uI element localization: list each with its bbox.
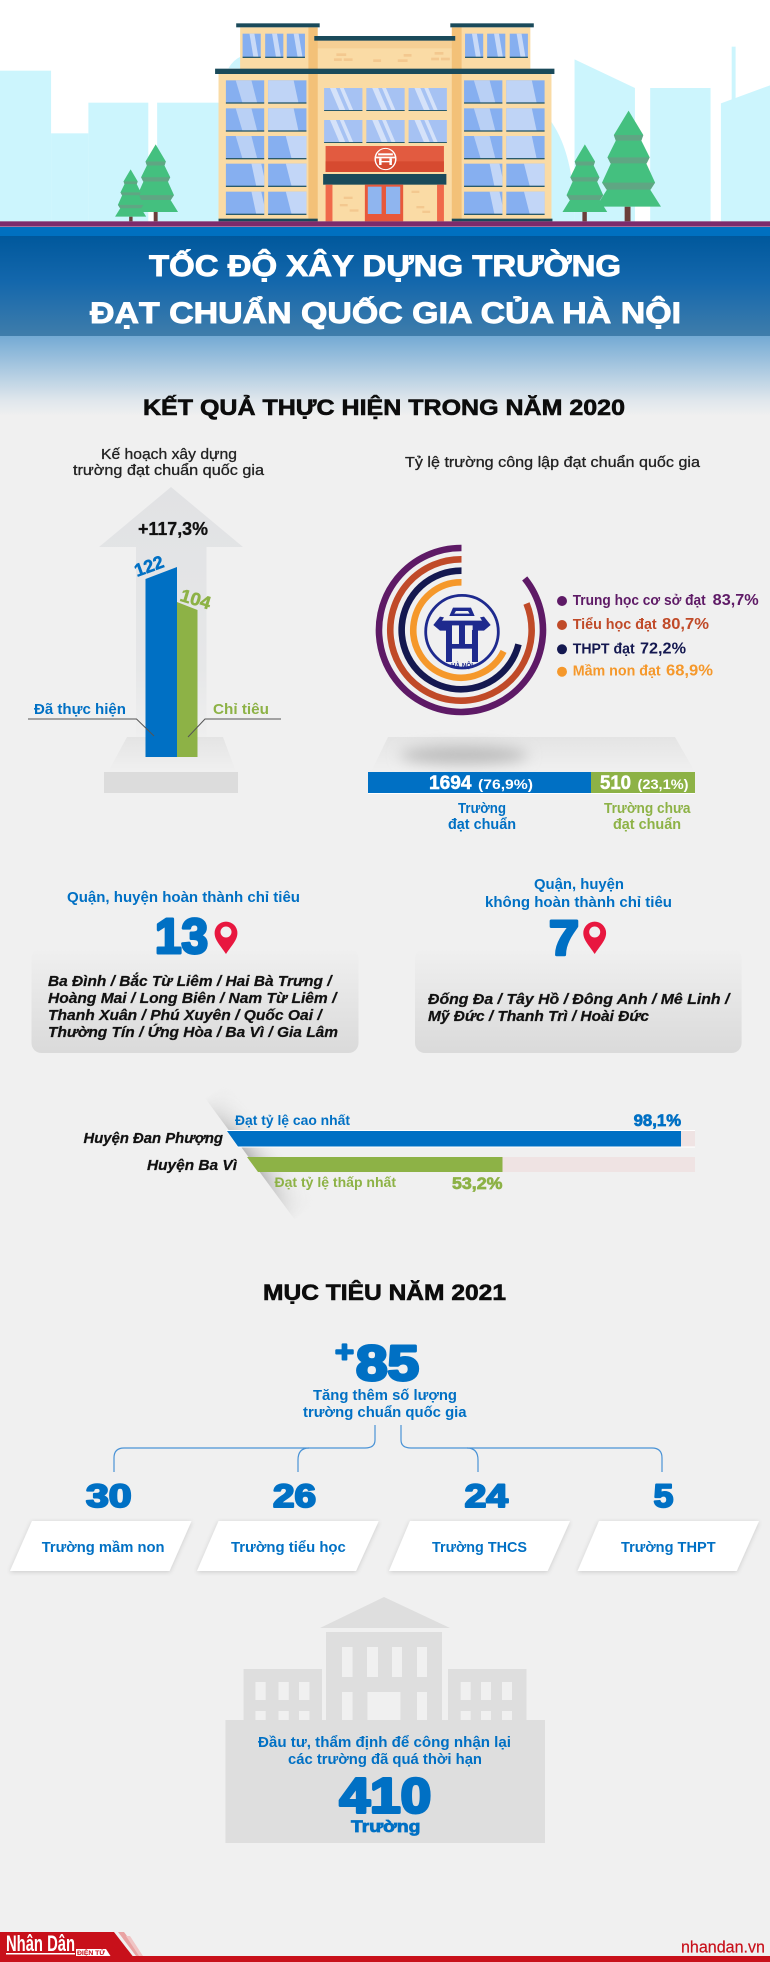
- panel heading: Quận, huyện hoàn thành chỉ tiêu: [67, 889, 300, 906]
- callout: +85: [303, 1336, 467, 1421]
- bar: target 104: [177, 602, 198, 757]
- title: TỐC ĐỘ XÂY DỰNG TRƯỜNG: [149, 249, 621, 283]
- chart: highest and lowest rate: [84, 1104, 695, 1212]
- site url: nhandan.vn: [681, 1938, 765, 1957]
- district list: Thanh Xuân / Phú Xuyên / Quốc Oai /: [48, 1008, 324, 1024]
- label: Ba Vi: Huyện Ba Vì: [147, 1158, 237, 1174]
- target card: lower secondary: [389, 1478, 570, 1571]
- target card: high school: [578, 1478, 759, 1571]
- segment values: (23,1%): [638, 776, 688, 792]
- panel: grey school with re-accreditation figure: [225, 1597, 545, 1843]
- target card: high school: 5: [654, 1478, 673, 1514]
- heading: 2021 targets: MỤC TIÊU NĂM 2021: [263, 1280, 506, 1305]
- title band: [0, 227, 770, 416]
- label: target: Chỉ tiêu: [213, 701, 269, 718]
- legend item: primary: 80,7%: [662, 616, 709, 633]
- description: [258, 1734, 511, 1768]
- legend item: lower secondary: Trung học cơ sở đạt: [573, 592, 706, 609]
- segment: non-standard: [591, 772, 695, 793]
- legend item: preschool: Mầm non đạt: [573, 663, 661, 680]
- district list: Mỹ Đức / Thanh Trì / Hoài Đức: [428, 1009, 649, 1025]
- heading: plan chart: Kế hoạch xây dựng: [101, 446, 237, 463]
- logo tab: ĐIỆN TỬ: [77, 1948, 106, 1957]
- legend item: high school: [557, 640, 686, 657]
- target card: preschool: [10, 1478, 192, 1571]
- district list: Ba Đình / Bắc Từ Liêm / Hai Bà Trưng /: [48, 972, 334, 990]
- icon: map pin: [215, 922, 237, 954]
- value 53,2%: 53,2%: [452, 1174, 502, 1193]
- number 410: 410: [340, 1770, 431, 1824]
- description: Đầu tư, thẩm định để công nhận lại: [258, 1734, 511, 1751]
- segment values: (76,9%): [478, 776, 533, 792]
- label: standard: Trường: [458, 801, 506, 817]
- icon: map pin: [583, 922, 606, 954]
- callout: +85: Tăng thêm số lượng: [313, 1387, 457, 1404]
- target card: high school: Trường THPT: [621, 1539, 716, 1556]
- label: non-standard: Trường chưa: [604, 801, 691, 817]
- label: Dan Phuong: Huyện Đan Phượng: [84, 1131, 223, 1147]
- icon: Hanoi emblem: HÀ NỘI: [451, 661, 473, 670]
- unit: Trường: [351, 1817, 420, 1836]
- chart: radial rings: [379, 548, 543, 712]
- legend item: preschool: [557, 663, 713, 680]
- legend item: lower secondary: 83,7%: [713, 592, 759, 609]
- district list: Thường Tín / Ứng Hòa / Ba Vì / Gia Lâm: [48, 1023, 338, 1041]
- bar: Ba Vi: [247, 1157, 695, 1172]
- legend item: primary: Tiểu học đạt: [573, 616, 657, 633]
- icon: school silhouette: [225, 1597, 545, 1843]
- logo tab: Nhân Dân: [6, 1931, 75, 1956]
- legend item: preschool: 68,9%: [666, 663, 713, 680]
- label: highest: Đạt tỷ lệ cao nhất: [235, 1112, 350, 1128]
- skyline: [0, 47, 770, 221]
- heading: plan chart: [73, 446, 265, 479]
- title: ĐẠT CHUẨN QUỐC GIA CỦA HÀ NỘI: [90, 296, 681, 330]
- bar: done 122: [146, 567, 177, 757]
- trees: [115, 111, 661, 221]
- label: standard: đạt chuẩn: [448, 817, 516, 833]
- district list: Hoàng Mai / Long Biên / Nam Từ Liêm /: [48, 991, 339, 1007]
- icon: Hanoi emblem: [426, 595, 498, 670]
- panel heading: Quận, huyện: [534, 876, 624, 893]
- value 98,1%: 98,1%: [634, 1111, 681, 1130]
- target card: primary: 26: [273, 1478, 316, 1514]
- pedestal with shadow: [371, 737, 695, 772]
- label: done: Đã thực hiện: [34, 701, 126, 718]
- legend item: high school: THPT đạt: [573, 640, 635, 657]
- footer: [0, 1931, 770, 1962]
- target card: primary: [197, 1478, 379, 1571]
- legend item: high school: 72,2%: [640, 640, 686, 657]
- value 122: 122: [132, 552, 167, 581]
- heading: results 2020: KẾT QUẢ THỰC HIỆN TRONG NĂM 2020: [143, 395, 625, 420]
- segment values: 1694: [429, 773, 472, 794]
- connector lines: [114, 1425, 662, 1472]
- header illustration: school and skyline: [0, 0, 770, 228]
- label: standard: [448, 801, 516, 833]
- panel: districts missing target: [415, 876, 742, 1053]
- value 104: 104: [178, 585, 213, 613]
- ground line: [0, 221, 770, 227]
- legend: ring chart: [557, 592, 759, 680]
- number 13: 13: [155, 910, 208, 964]
- district list: Đống Đa / Tây Hồ / Đông Anh / Mê Linh /: [428, 992, 732, 1008]
- callout: +85: 85: [356, 1337, 419, 1391]
- panel heading: [485, 876, 672, 911]
- title: [90, 249, 681, 330]
- segment values: [429, 773, 688, 794]
- segment values: 510: [600, 773, 631, 794]
- percent label: +117,3%: [138, 519, 208, 539]
- pedestal: [104, 737, 238, 793]
- heading: plan chart: trường đạt chuẩn quốc gia: [73, 462, 265, 479]
- label: non-standard: đạt chuẩn: [613, 817, 681, 833]
- callout: +85: trường chuẩn quốc gia: [303, 1404, 467, 1421]
- panel: districts reaching target: [32, 889, 358, 1053]
- stacked bar: standard vs non-standard schools: [368, 737, 695, 833]
- target card: preschool: 30: [86, 1478, 132, 1514]
- leader lines: [28, 719, 281, 737]
- label: lowest: Đạt tỷ lệ thấp nhất: [274, 1174, 396, 1190]
- district list: [48, 972, 339, 1041]
- description: các trường đã quá thời hạn: [288, 1751, 482, 1768]
- building: [215, 23, 554, 221]
- segment: standard: [368, 772, 591, 793]
- bar: Dan Phuong: [226, 1130, 695, 1148]
- target card: preschool: Trường mầm non: [42, 1539, 165, 1556]
- callout: +85: +: [335, 1336, 354, 1369]
- label: non-standard: [604, 801, 691, 833]
- number 7: 7: [549, 912, 579, 966]
- target card: lower secondary: 24: [465, 1478, 508, 1514]
- chart: plan arrow with bars: [28, 487, 281, 793]
- target card: primary: Trường tiểu học: [231, 1539, 346, 1556]
- icon: grey up arrow: [99, 487, 243, 745]
- logo tab: [0, 1931, 143, 1962]
- legend item: primary: [557, 616, 709, 633]
- target card: lower secondary: Trường THCS: [432, 1539, 527, 1556]
- panel heading: không hoàn thành chỉ tiêu: [485, 894, 672, 911]
- heading: ratio chart: Tỷ lệ trường công lập đạt chuẩn quốc gia: [405, 454, 701, 471]
- district list: [428, 992, 732, 1025]
